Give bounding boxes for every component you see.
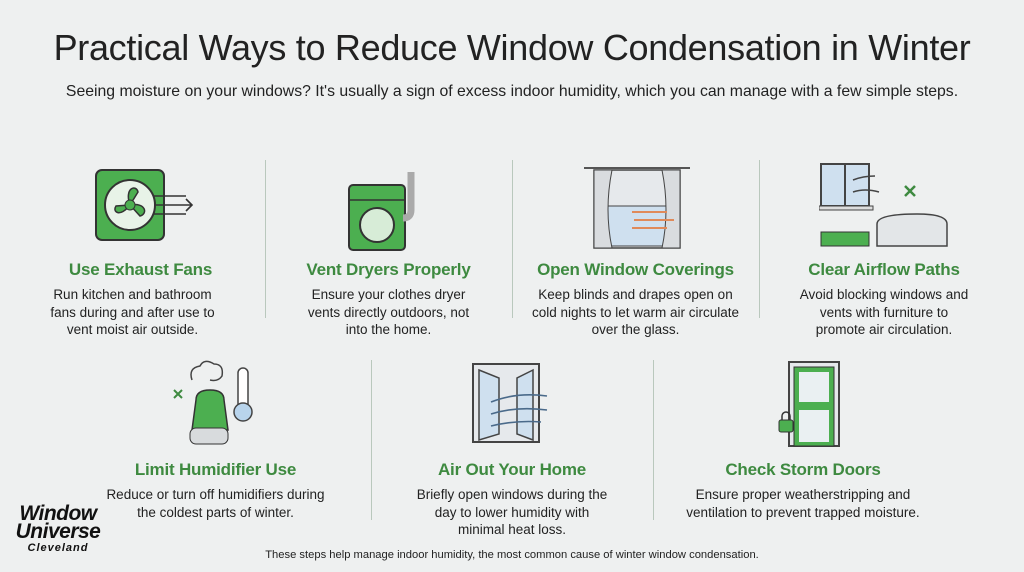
- text: [417, 487, 607, 537]
- panel: humidifier: [106, 360, 325, 520]
- text: [800, 287, 968, 337]
- footer note: These steps help manage indoor humidity, the most common cause of winter window condensation.: [265, 549, 759, 561]
- text: fans during and after use to: [50, 304, 215, 320]
- icon: storm door with lock: [778, 361, 840, 447]
- text: vent moist air outside.: [67, 322, 198, 337]
- panel: window coverings: [532, 167, 739, 337]
- text: ventilation to prevent trapped moisture.: [686, 504, 920, 520]
- subtitle: Seeing moisture on your windows? It's usually a sign of excess indoor humidity, which you can manage with a few simple steps.: [66, 83, 958, 100]
- heading: Check Storm Doors: [725, 460, 881, 479]
- icon: window with curtains: [584, 167, 690, 249]
- text: day to lower humidity with: [435, 504, 589, 520]
- text: minimal heat loss.: [458, 522, 566, 537]
- icon: window, vent, sofa: [819, 163, 948, 247]
- text: cold nights to let warm air circulate: [532, 304, 739, 320]
- text: Run kitchen and bathroom: [53, 287, 212, 302]
- heading: Limit Humidifier Use: [135, 460, 296, 479]
- text: [686, 487, 920, 520]
- panel: exhaust fans: [50, 169, 215, 337]
- panel: vent dryers: [306, 172, 471, 337]
- panel: air out home: [417, 363, 607, 537]
- icon: dryer: [348, 172, 414, 251]
- text: [106, 487, 325, 520]
- title: Practical Ways to Reduce Window Condensation in Winter: [54, 27, 970, 68]
- logo: [16, 502, 100, 554]
- icon: open window with breeze: [472, 363, 548, 443]
- logo: Cleveland: [28, 542, 88, 554]
- text: Ensure proper weatherstripping and: [696, 487, 910, 502]
- text: into the home.: [346, 322, 431, 337]
- logo: Window: [19, 502, 97, 525]
- text: over the glass.: [592, 322, 679, 337]
- text: [532, 287, 739, 337]
- text: [308, 287, 470, 337]
- text: Reduce or turn off humidifiers during: [106, 487, 325, 502]
- heading: Open Window Coverings: [537, 260, 734, 279]
- text: Ensure your clothes dryer: [312, 287, 465, 302]
- icon: exhaust fan: [95, 169, 193, 241]
- logo: Universe: [16, 520, 100, 543]
- text: the coldest parts of winter.: [137, 504, 294, 520]
- text: vents with furniture to: [820, 304, 948, 320]
- text: [50, 287, 215, 337]
- text: Avoid blocking windows and: [800, 287, 968, 302]
- text: vents directly outdoors, not: [308, 304, 469, 320]
- heading: Air Out Your Home: [438, 460, 586, 479]
- heading: Use Exhaust Fans: [69, 260, 212, 279]
- text: promote air circulation.: [816, 322, 952, 337]
- heading: Vent Dryers Properly: [306, 260, 471, 279]
- text: Keep blinds and drapes open on: [538, 287, 733, 302]
- panel: airflow paths: [800, 163, 968, 337]
- heading: Clear Airflow Paths: [808, 260, 960, 279]
- text: Briefly open windows during the: [417, 487, 607, 502]
- icon: humidifier and thermometer: [173, 360, 253, 444]
- panel: storm doors: [686, 361, 920, 520]
